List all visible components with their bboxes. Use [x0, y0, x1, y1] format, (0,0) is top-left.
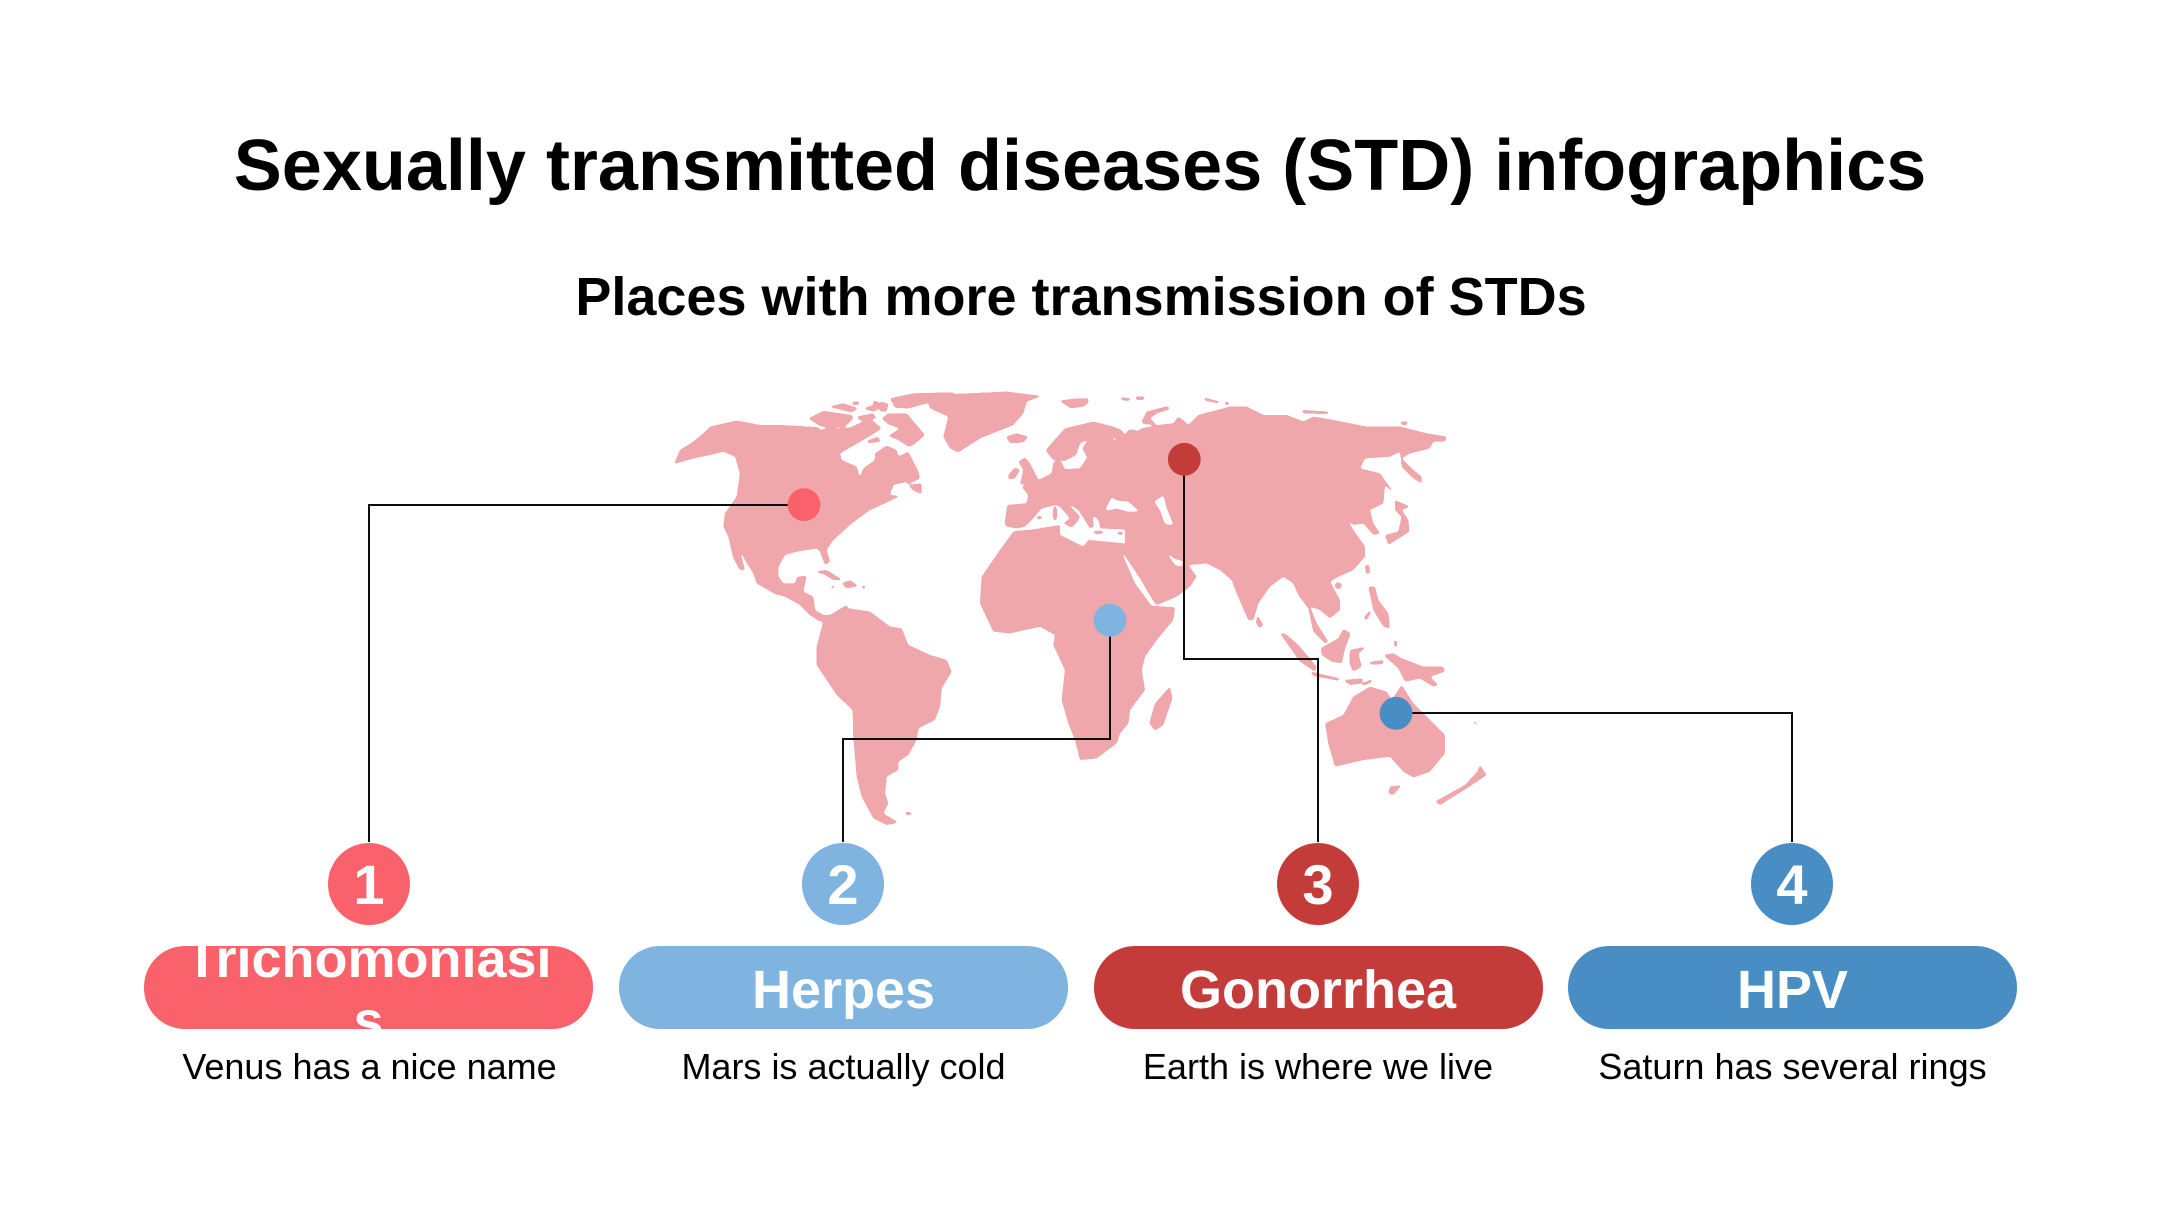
description 3: Earth is where we live	[1143, 1046, 1493, 1087]
map dot: Africa	[1094, 604, 1126, 637]
connector 2	[843, 620, 1110, 842]
subtitle: Places with more transmission of STDs	[575, 267, 1587, 327]
pill: Gonorrhea: Gonorrhea	[1180, 960, 1456, 1020]
pill: Gonorrhea	[1094, 946, 1542, 1029]
number badge 1: 1	[353, 853, 385, 916]
description 4: Saturn has several rings	[1598, 1046, 1987, 1087]
description 1: Venus has a nice name	[182, 1046, 557, 1087]
americas	[674, 392, 1042, 825]
connector 4	[1396, 713, 1792, 842]
map dot: USA	[788, 488, 820, 521]
description 2: Mars is actually cold	[681, 1046, 1006, 1087]
number badge 3: 3	[1302, 853, 1334, 916]
number badge 4: 4	[1776, 853, 1808, 916]
pill: HPV	[1568, 946, 2017, 1029]
eurasia africa oceania	[980, 397, 1487, 805]
connector 3	[1184, 459, 1318, 842]
number badge 2: 2	[827, 853, 859, 916]
inland seas	[892, 437, 1341, 586]
map dot: Russia	[1168, 443, 1201, 476]
world map	[674, 392, 1487, 825]
title: Sexually transmitted diseases (STD) infographics	[234, 126, 1926, 206]
map dot: Australia	[1380, 697, 1412, 730]
pill: HPV: HPV	[1737, 960, 1848, 1020]
pill: Herpes: Herpes	[752, 960, 935, 1020]
pill: Herpes	[619, 946, 1068, 1029]
pill: Trichomoniasis	[144, 946, 593, 1029]
number badge 1	[328, 843, 410, 925]
number badge 4	[1751, 843, 1833, 925]
number badge 2	[802, 843, 884, 925]
land masses	[674, 392, 1487, 825]
mediterranean islands	[1037, 506, 1342, 589]
connector 1	[369, 505, 804, 842]
number badge 3	[1277, 843, 1359, 925]
